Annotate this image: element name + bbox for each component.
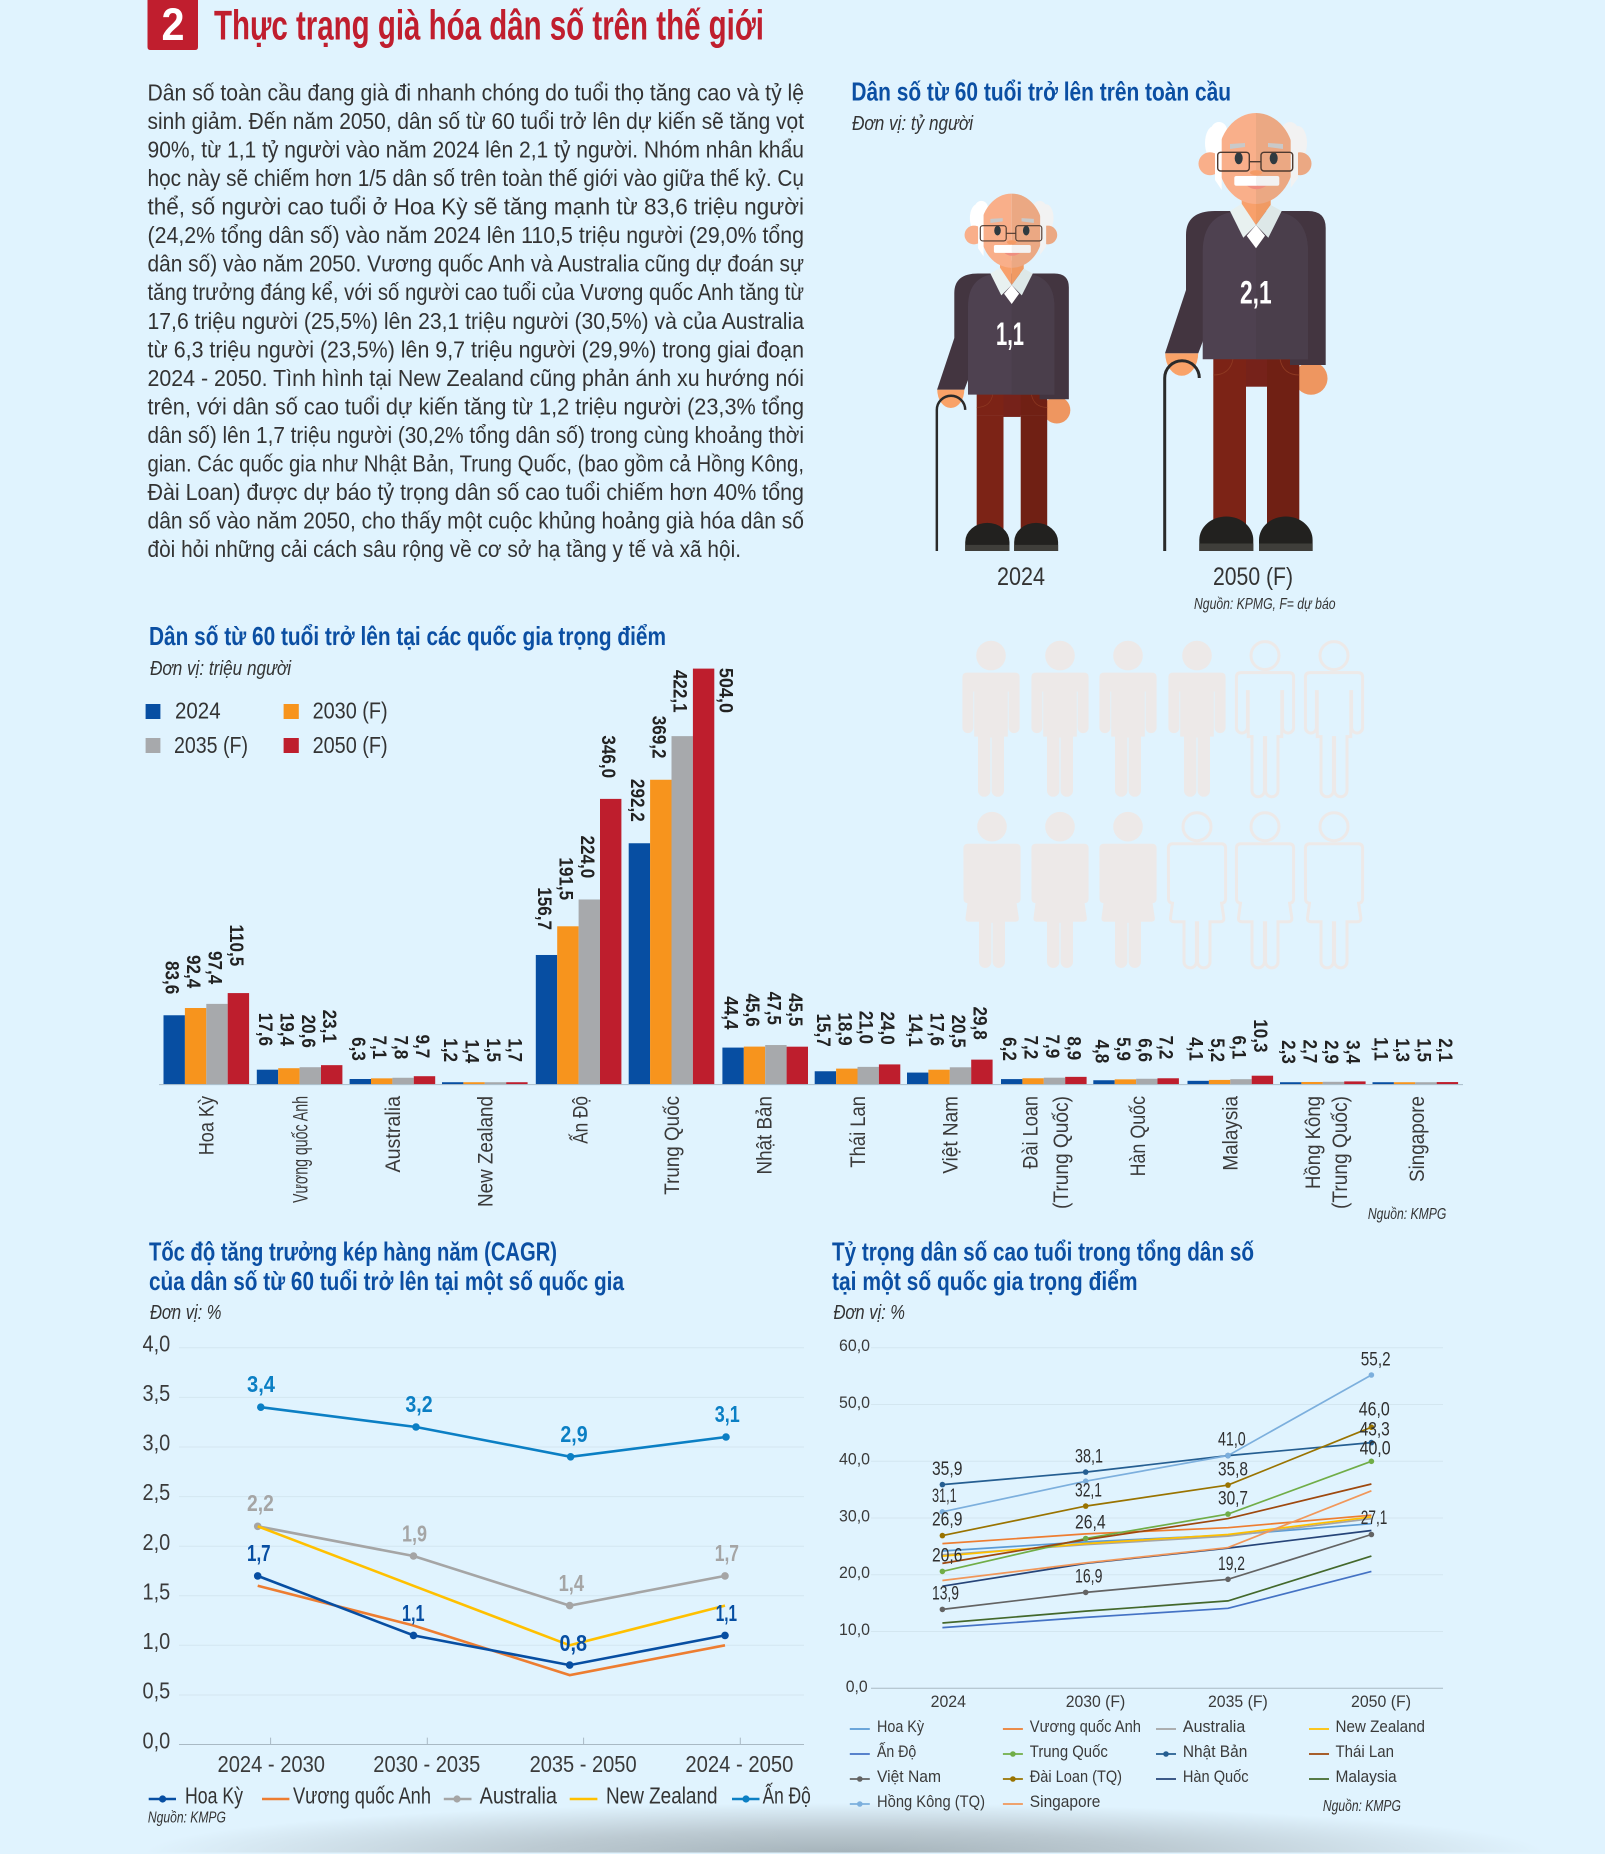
value labels: 31,1 [932, 1486, 957, 1507]
x axis labels [218, 1751, 793, 1777]
value labels: 20,6 [932, 1546, 962, 1567]
bar group: Ấn Độ [534, 735, 621, 1084]
bar group: Hồng Kông: 2,9 [1321, 1040, 1342, 1064]
bar group: Hoa Kỳ: 92,4 [183, 955, 204, 988]
legend: Vương quốc Anh [1030, 1717, 1141, 1736]
bar group: Thái Lan: 15,7 [813, 1013, 834, 1047]
bar group: Hàn Quốc [1091, 1036, 1179, 1084]
y axis labels: 3,0 [142, 1430, 170, 1456]
bar group: Ấn Độ: 346,0 [598, 735, 619, 778]
legend: Trung Quốc [1030, 1742, 1108, 1761]
bar group: Nhật Bản: 45,5 [785, 993, 806, 1026]
y axis labels: 2,0 [142, 1529, 170, 1555]
bar group: Việt Nam: 29,8 [969, 1007, 990, 1040]
bar group: Australia: 7,8 [390, 1036, 411, 1059]
label 2024: 2024 [997, 563, 1045, 591]
intro text block: từ 6,3 triệu người (23,5%) lên 9,7 triệu người (29,9%) trong giai đoạn [148, 336, 804, 362]
bar group: Nhật Bản: 45,6 [742, 994, 763, 1027]
legend [146, 698, 388, 758]
value labels: 1,9 [402, 1520, 427, 1546]
value labels: 1,1 [402, 1600, 425, 1626]
bar group: Australia [348, 1034, 435, 1084]
y axis labels: 50,0 [839, 1393, 870, 1412]
bar group: Thái Lan: 21,0 [855, 1011, 877, 1044]
source: Nguồn: KMPG [1323, 1798, 1401, 1815]
y axis labels: 20,0 [839, 1563, 870, 1582]
value labels: 41,0 [1218, 1430, 1246, 1451]
panel: share of elderly line chart [832, 1236, 1443, 1815]
bar group: Đài Loan: 7,2 [1020, 1036, 1041, 1059]
heading: Tỷ trọng dân số cao tuổi trong tổng dân số [832, 1236, 1254, 1266]
y axis labels: 30,0 [839, 1506, 870, 1525]
country axis labels [196, 1096, 1429, 1209]
bar group: Hồng Kông: 2,3 [1278, 1040, 1299, 1064]
value labels: 38,1 [1075, 1447, 1103, 1468]
legend: 2035 (F) [174, 732, 248, 758]
bar group: Việt Nam: 17,6 [926, 1013, 947, 1046]
value labels: 2,2 [247, 1490, 274, 1516]
value labels: 3,4 [247, 1371, 275, 1397]
y axis labels: 0,0 [846, 1677, 868, 1696]
value labels: 26,4 [1075, 1512, 1106, 1534]
heading: Tốc độ tăng trưởng kép hàng năm (CAGR) [149, 1236, 557, 1266]
y axis labels: 10,0 [839, 1620, 870, 1639]
intro text block: dân số) lên 1,7 triệu người (30,2% tổng dân số) trong cùng khoảng thời [148, 422, 804, 448]
bar group: Việt Nam [905, 1007, 993, 1084]
source: Nguồn: KMPG [1368, 1206, 1446, 1223]
country axis labels: Vương quốc Anh [289, 1096, 312, 1203]
bar group: Nhật Bản: 47,5 [763, 992, 784, 1025]
legend: Ấn Độ [763, 1782, 811, 1808]
country axis labels: Thái Lan [847, 1096, 870, 1168]
intro text block: gian. Các quốc gia như Nhật Bản, Trung Quốc, (bao gồm cả Hồng Kông, [148, 451, 804, 477]
country axis labels: Trung Quốc [661, 1096, 684, 1195]
bar group: Việt Nam: 20,5 [948, 1015, 969, 1048]
section number badge: 2 [162, 0, 184, 50]
bar group: Malaysia: 10,3 [1250, 1019, 1271, 1052]
y axis labels: 3,5 [142, 1380, 170, 1406]
bar group: Australia: 9,7 [412, 1034, 433, 1058]
bar group: New Zealand: 1,4 [461, 1039, 482, 1063]
bar group: Thái Lan [813, 1011, 900, 1084]
intro text block: dân số) vào năm 2050. Vương quốc Anh và Australia cũng dự đoán sự [148, 251, 804, 277]
value labels: 1,7 [715, 1540, 739, 1566]
unit: Đơn vị: % [150, 1302, 222, 1324]
x axis labels: 2035 (F) [1208, 1692, 1268, 1711]
value labels: 13,9 [932, 1583, 959, 1604]
intro text block: thể, số người cao tuổi ở Hoa Kỳ sẽ tăng mạnh từ 83,6 triệu người [148, 194, 804, 220]
bar group: Trung Quốc: 422,1 [669, 670, 691, 713]
intro text block: Dân số toàn cầu đang già đi nhanh chóng do tuổi thọ tăng cao và tỷ lệ [148, 79, 804, 105]
bar group: Hồng Kông [1278, 1039, 1366, 1084]
bar group: Ấn Độ: 156,7 [534, 887, 555, 930]
country axis labels: Malaysia [1220, 1096, 1243, 1171]
legend: Australia [480, 1782, 557, 1808]
value labels: 16,9 [1075, 1566, 1102, 1587]
value labels: 1,7 [247, 1540, 271, 1566]
bar group: Trung Quốc [627, 668, 737, 1084]
bar group: Vương quốc Anh: 20,6 [298, 1015, 319, 1048]
value labels: 2,9 [560, 1421, 588, 1447]
legend: Đài Loan (TQ) [1030, 1767, 1122, 1786]
heading [832, 1236, 1254, 1296]
panel: global population aged 60+ [851, 77, 1336, 613]
bar group: Hoa Kỳ: 97,4 [204, 951, 225, 984]
bar group: Australia: 7,1 [369, 1036, 390, 1059]
bar group: Malaysia: 6,1 [1228, 1036, 1249, 1059]
country axis labels: Hoa Kỳ [196, 1096, 219, 1155]
country axis labels: (Trung Quốc) [1050, 1096, 1073, 1209]
bar group: Vương quốc Anh: 23,1 [319, 1010, 340, 1043]
legend: New Zealand [1336, 1717, 1425, 1736]
country axis labels: Singapore [1406, 1096, 1429, 1182]
icon: elderly man 2050 [1165, 113, 1328, 551]
bar group: Trung Quốc: 369,2 [648, 716, 669, 758]
country axis labels: Ấn Độ [569, 1096, 592, 1144]
bar group: Hàn Quốc: 4,8 [1091, 1039, 1112, 1063]
country axis labels: Hồng Kông [1302, 1096, 1325, 1189]
bar group: New Zealand: 1,7 [504, 1038, 525, 1062]
bar group: Malaysia: 5,2 [1207, 1038, 1228, 1062]
bar group: Việt Nam: 14,1 [905, 1013, 926, 1047]
bar group: Singapore [1370, 1037, 1458, 1084]
bar group: Vương quốc Anh [255, 1010, 342, 1084]
bar group: Nhật Bản: 44,4 [720, 996, 741, 1030]
bar group: Australia: 6,3 [348, 1037, 369, 1061]
bar group: Malaysia [1185, 1019, 1273, 1084]
y axis labels: 60,0 [839, 1336, 870, 1355]
legend: Việt Nam [877, 1767, 941, 1786]
panel: bar chart population by country [146, 621, 1463, 1223]
value labels: 27,1 [1361, 1508, 1387, 1529]
bar group: Singapore: 1,5 [1413, 1038, 1434, 1062]
legend: Hồng Kông (TQ) [877, 1792, 985, 1811]
x axis labels: 2024 - 2030 [218, 1751, 325, 1777]
label 2050: 2050 (F) [1213, 563, 1293, 591]
value labels: 35,8 [1218, 1460, 1248, 1481]
intro text block: Đài Loan) được dự báo tỷ trọng dân số cao tuổi chiếm hơn 40% tổng [148, 479, 804, 505]
legend: Hàn Quốc [1183, 1767, 1249, 1786]
x axis labels: 2035 - 2050 [530, 1751, 637, 1777]
line: Hoa Kỳ [254, 1572, 729, 1669]
line: New Zealand [258, 1526, 725, 1645]
line: Vương quốc Anh [258, 1586, 725, 1675]
bar group: Hồng Kông: 3,4 [1342, 1040, 1363, 1064]
y axis labels: 0,0 [142, 1728, 170, 1754]
line markers [940, 1372, 1374, 1612]
legend: Vương quốc Anh [293, 1782, 431, 1808]
bar group: Singapore: 2,1 [1435, 1038, 1456, 1062]
country axis labels: Australia [382, 1096, 405, 1172]
value labels: 43,3 [1360, 1420, 1390, 1440]
legend: New Zealand [606, 1782, 718, 1808]
value labels: 26,9 [932, 1509, 962, 1530]
bar group: Đài Loan [999, 1034, 1087, 1084]
heading [149, 1236, 624, 1296]
y axis labels: 1,5 [142, 1578, 170, 1604]
value labels: 32,1 [1075, 1481, 1102, 1502]
panel: CAGR line chart [142, 1236, 811, 1826]
source: Nguồn: KMPG [148, 1810, 226, 1826]
bar group: Ấn Độ: 191,5 [555, 857, 576, 900]
value labels: 1,1 [716, 1600, 737, 1626]
legend: Ấn Độ [877, 1742, 916, 1761]
bar group: Hàn Quốc: 6,6 [1134, 1038, 1155, 1062]
bar group: Thái Lan: 18,9 [834, 1012, 855, 1046]
icon: elderly man 2024 [937, 194, 1070, 551]
value labels [247, 1371, 740, 1656]
y axis labels [142, 1330, 170, 1754]
line: Australia [254, 1522, 729, 1609]
legend: 2030 (F) [313, 698, 388, 724]
heading: của dân số từ 60 tuổi trở lên tại một số quốc gia [149, 1266, 624, 1296]
legend: Singapore [1030, 1792, 1100, 1811]
icon: elderly man 2024: 1,1 [996, 316, 1024, 352]
section number badge [148, 0, 198, 50]
legend: Malaysia [1336, 1767, 1397, 1786]
bar group: Hàn Quốc: 5,9 [1113, 1037, 1134, 1061]
intro text block: (24,2% tổng dân số) vào năm 2024 lên 110,5 triệu người (29,0% tổng [148, 222, 804, 248]
value labels [932, 1350, 1391, 1604]
bar group: Hàn Quốc: 7,2 [1155, 1036, 1177, 1059]
legend: 2050 (F) [313, 732, 388, 758]
intro text block: 17,6 triệu người (25,5%) lên 23,1 triệu người (30,5%) và của Australia [148, 308, 804, 334]
value labels: 1,4 [559, 1570, 584, 1596]
legend [850, 1717, 1425, 1811]
x axis labels: 2024 - 2050 [685, 1751, 793, 1777]
bar group: Hoa Kỳ: 83,6 [161, 961, 183, 994]
bar group: Đài Loan: 8,9 [1063, 1036, 1084, 1060]
y axis labels: 40,0 [839, 1450, 870, 1468]
legend: Australia [1183, 1717, 1246, 1736]
country axis labels: Hàn Quốc [1127, 1096, 1150, 1176]
bar group: Hoa Kỳ: 110,5 [226, 924, 247, 966]
x axis labels [931, 1692, 1411, 1711]
bar group: Hoa Kỳ [161, 924, 249, 1084]
intro text block [148, 79, 805, 562]
bottom shadow [100, 1790, 1590, 1852]
intro text block: tăng trưởng đáng kể, với số người cao tuổi của Vương quốc Anh tăng từ [148, 279, 804, 305]
bar group: Singapore: 1,1 [1370, 1037, 1392, 1061]
value labels: 40,0 [1360, 1438, 1391, 1460]
intro text block: 2024 - 2050. Tình hình tại New Zealand cũng phản ánh xu hướng nói [148, 365, 804, 391]
legend: Hoa Kỳ [877, 1717, 924, 1736]
bar group: Malaysia: 4,1 [1185, 1037, 1207, 1061]
country axis labels: Đài Loan [1020, 1096, 1043, 1169]
pictogram: people background [962, 641, 1363, 968]
country axis labels: Nhật Bản [754, 1096, 777, 1174]
value labels: 19,2 [1218, 1554, 1245, 1575]
heading: Dân số từ 60 tuổi trở lên trên toàn cầu [851, 77, 1231, 107]
intro text block: dân số vào năm 2050, cho thấy một cuộc khủng hoảng già hóa dân số [148, 508, 804, 534]
legend: 2024 [175, 698, 221, 724]
title: Thực trạng già hóa dân số trên thế giới [214, 1, 764, 48]
intro text block: học này sẽ chiếm hơn 1/5 dân số trên toàn thế giới vào giữa thế kỷ. Cụ [148, 165, 804, 191]
multi-line series [942, 1375, 1371, 1628]
bar group: Đài Loan: 6,2 [999, 1037, 1020, 1061]
unit: Đơn vị: tỷ người [852, 113, 973, 135]
y axis labels: 2,5 [142, 1479, 170, 1505]
icon: elderly man 2050: 2,1 [1240, 274, 1272, 310]
legend: Nhật Bản [1183, 1742, 1247, 1761]
bar group: Ấn Độ: 224,0 [577, 836, 598, 878]
bar group: Singapore: 1,3 [1392, 1038, 1413, 1062]
source: Nguồn: KPMG, F= dự báo [1194, 596, 1336, 613]
value labels: 55,2 [1361, 1350, 1391, 1371]
bar group: Vương quốc Anh: 19,4 [276, 1013, 297, 1046]
bar group: New Zealand: 1,2 [440, 1038, 461, 1062]
value labels: 46,0 [1359, 1399, 1390, 1420]
unit: Đơn vị: % [834, 1302, 905, 1324]
line: Ấn Độ [257, 1403, 730, 1461]
bar group: New Zealand: 1,5 [483, 1038, 504, 1062]
legend [149, 1782, 811, 1808]
bar group: Đài Loan: 7,9 [1042, 1034, 1063, 1058]
bar group: Nhật Bản [720, 992, 808, 1084]
intro text block: đòi hỏi những cải cách sâu rộng về cơ sở hạ tầng y tế và xã hội. [148, 536, 741, 562]
value labels: 3,1 [715, 1401, 740, 1427]
country axis labels: (Trung Quốc) [1329, 1096, 1352, 1209]
section header [148, 0, 764, 50]
x axis labels: 2024 [931, 1692, 966, 1711]
bar group: Trung Quốc: 292,2 [627, 779, 648, 822]
value labels: 30,7 [1218, 1488, 1248, 1509]
intro text block: trên, với dân số cao tuổi dự kiến tăng từ 1,2 triệu người (23,3% tổng [148, 394, 804, 420]
legend: Thái Lan [1336, 1742, 1394, 1761]
value labels: 35,9 [932, 1459, 962, 1480]
intro text block: 90%, từ 1,1 tỷ người vào năm 2024 lên 2,1 tỷ người. Nhóm nhân khẩu [148, 136, 804, 162]
y axis labels [839, 1336, 870, 1696]
legend: Hoa Kỳ [185, 1782, 243, 1808]
value labels: 0,8 [560, 1630, 587, 1656]
y axis labels: 0,5 [142, 1678, 170, 1704]
x axis labels: 2050 (F) [1351, 1692, 1411, 1711]
intro text block: sinh giảm. Đến năm 2050, dân số từ 60 tuổi trở lên dự kiến sẽ tăng vọt [148, 108, 805, 134]
bar group: Thái Lan: 24,0 [877, 1012, 898, 1045]
value labels: 3,2 [405, 1391, 433, 1417]
y axis labels: 4,0 [142, 1330, 170, 1356]
y axis labels: 1,0 [142, 1628, 170, 1654]
x axis labels: 2030 (F) [1066, 1692, 1125, 1711]
bar group: New Zealand [440, 1038, 528, 1084]
heading: Dân số từ 60 tuổi trở lên tại các quốc gia trọng điểm [149, 621, 666, 651]
unit: Đơn vị: triệu người [150, 658, 291, 680]
heading: tại một số quốc gia trọng điểm [832, 1266, 1138, 1296]
country axis labels: Việt Nam [939, 1096, 962, 1174]
bar group: Hồng Kông: 2,7 [1299, 1039, 1320, 1063]
x axis labels: 2030 - 2035 [373, 1751, 480, 1777]
country axis labels: New Zealand [475, 1096, 498, 1207]
bar group: Trung Quốc: 504,0 [716, 668, 737, 713]
bar group: Vương quốc Anh: 17,6 [255, 1013, 276, 1046]
